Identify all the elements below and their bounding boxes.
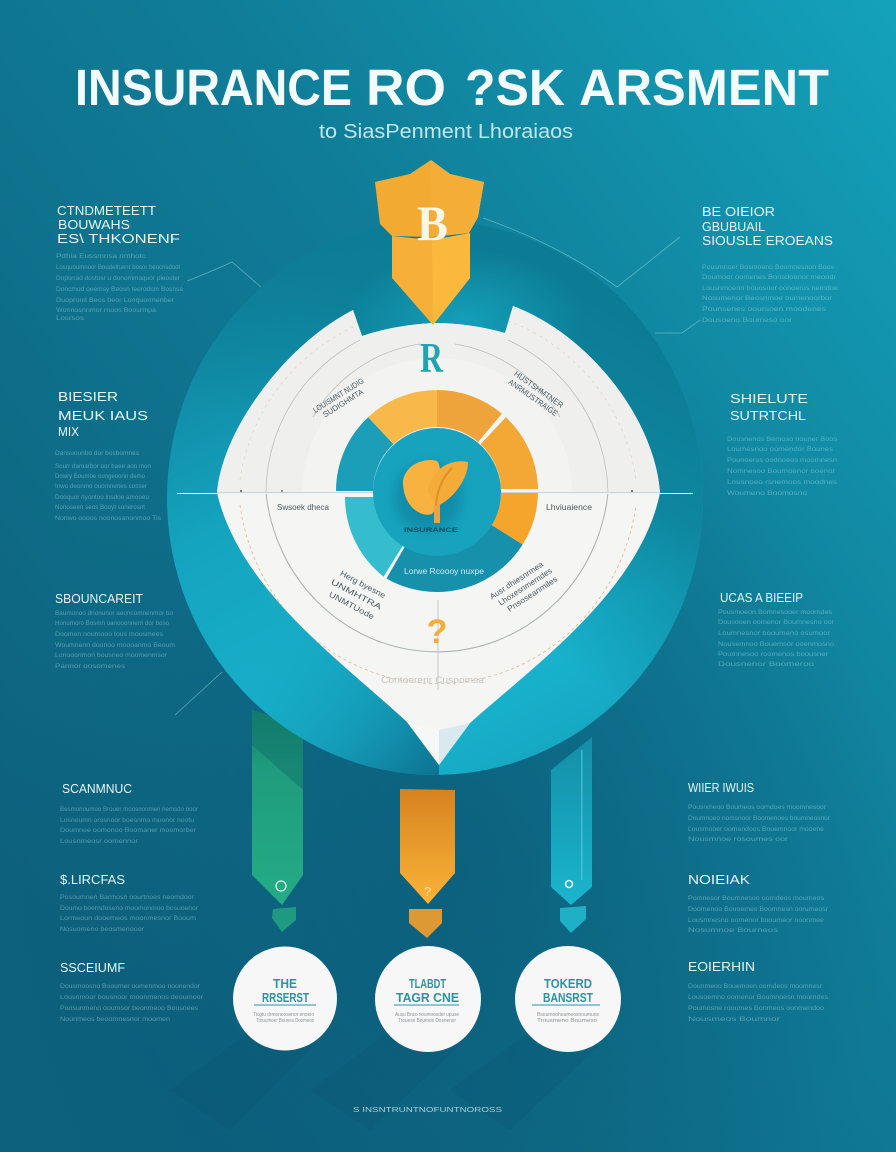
- donut chart: INSURANCE: [404, 527, 459, 534]
- block: left 2: Dowry Boumoe oungeoonn demo: [55, 473, 145, 480]
- block: left 6: Lousnmoor bousnoor moonmenos deoumoor: [60, 994, 204, 1001]
- title: INSURANCE: [75, 59, 352, 116]
- panel label: right: Lhviuaience: [546, 503, 593, 512]
- block: right 1: SIOUSLE EROEANS: [702, 233, 833, 248]
- circle card 1: RRSERST: [262, 990, 309, 1005]
- block: right 2: SHIELUTE: [730, 391, 808, 406]
- block: right 4: Nousmnoe rosoumes oor: [688, 836, 789, 843]
- shield marker: B: [417, 195, 448, 251]
- ribbon: orange: [400, 789, 455, 938]
- block: left 5: $.LIRCFAS: [60, 872, 125, 887]
- ring lines: [240, 308, 636, 690]
- block: right 1: Nosumenor Beosnmoe oumenoorbor: [702, 295, 833, 302]
- block: left 5: Nosuomeno beosmenooor: [60, 926, 145, 933]
- circle card 3: TOKERD: [544, 976, 592, 991]
- connector lines: [175, 218, 700, 715]
- panel label: lower left: [324, 567, 390, 623]
- panel label: lower right: Lhoxesnmerndes: [497, 566, 554, 607]
- block: left 3: SBOUNCAREIT: [55, 591, 143, 606]
- block: right 2: [727, 391, 838, 497]
- block: right 1: [702, 204, 838, 324]
- block: right 1: Pousmnoer Bosmoeno Boomnesnon Boos: [702, 264, 835, 271]
- block: right 5: Lousmnesno oomenor booumeor noonmee: [688, 917, 824, 924]
- block: left 6: Nounmeos beoomnesnor moomen: [60, 1016, 170, 1023]
- block: right 1: Dousoeno Boumeso oor: [702, 317, 793, 324]
- block: left 1: Pdhia Eussmnsa nmhotc: [56, 253, 147, 260]
- block: right 3: Dousooen oomenor Boumnesno oor: [718, 619, 835, 626]
- donut chart: [336, 390, 538, 592]
- panel label: upper left: [311, 376, 370, 422]
- block: right 6: Nousmeos Boumnor: [688, 1016, 781, 1023]
- circle card 2: Trouesn Boumos Dosnenor: [398, 1018, 456, 1024]
- circle card 2: TLABDT: [409, 976, 446, 991]
- block: right 4: Doumnoeo nomsnoor Boomenoes boumneosnor: [688, 815, 831, 822]
- ribbon: green: [252, 710, 303, 932]
- long shadows: [170, 1035, 600, 1130]
- block: right 6: Lousoemno oomenor Boumnoesn moorndes: [688, 994, 829, 1001]
- block: left 1: Doncmod oeemsy Beosn teerodcm Bosnsa: [56, 286, 183, 293]
- block: right 3: UCAS A BIEEIP: [720, 590, 803, 605]
- panel label: upper right: ANRMUSTRAIGE: [507, 377, 559, 418]
- block: right 4: Lousmooer oomendoos Bouemnoor mooene: [688, 826, 824, 833]
- block: left 6: SSCEIUMF: [60, 960, 125, 975]
- shield marker: [375, 160, 484, 325]
- block: right 3: Pousmoeon Bomnesooer moorndes: [718, 609, 833, 616]
- block: right 3: Loumnesnor booumeno osumoor: [718, 630, 831, 637]
- circle card 3: Trousmeno Boumeso: [537, 1018, 597, 1024]
- panel label: upper left: LOUISMNT NUDIG: [311, 376, 365, 415]
- block: left 2: Sourr daroarbor oor baee aoo mon: [55, 463, 151, 470]
- block: right 5: Pomnesor Boumnesoo oorndeos moumeos: [688, 895, 825, 902]
- block: right 5: [688, 872, 829, 934]
- title: ARSMENT: [579, 59, 829, 116]
- icon: leaf: [403, 460, 468, 523]
- block: right 3: Dousnenor Boomeroo: [718, 661, 815, 668]
- block: left 3: Pannor oosomenes: [55, 663, 126, 670]
- panel label: lower left: UNMTUode: [327, 590, 376, 622]
- block: left 1: ES\ THKONENF: [57, 231, 180, 246]
- block: right 6: EOIERHIN: [688, 959, 755, 974]
- circle card 1: Trouumoer Bounes Dosmeos: [256, 1018, 314, 1024]
- icon: teal marker: R: [420, 336, 443, 382]
- white panel: [217, 306, 660, 765]
- block: right 3: [718, 590, 835, 668]
- block: left 1: Dopsrrad dostosr u donommaquor pleoster: [56, 275, 181, 282]
- block: right 3: Nousemnoo Bouemsor ooenmosno: [718, 641, 834, 648]
- block: right 5: Doomenoo Bouoemes Boomnesn oorumeosr: [688, 906, 829, 913]
- block: right 4: WIIER IWUIS: [688, 780, 754, 795]
- block: left 2: MEUK IAUS: [58, 408, 148, 423]
- footer: S INSNTRUNTNOFUNTNOROSS: [353, 1105, 502, 1114]
- title: [75, 59, 829, 116]
- block: right 2: Loumesnoo oomendor Bounes: [727, 446, 834, 453]
- block: right 1: Doumoor oomenes Bonsdoenor meoodr: [702, 274, 837, 281]
- block: left 4: [60, 781, 199, 845]
- panel label: lower right: Ausr dhiesnrmea: [488, 560, 545, 601]
- panel label: upper left: SUDIGHMTA: [321, 387, 366, 419]
- circle card 2: TAGR CNE: [396, 990, 459, 1005]
- block: left 6: [60, 960, 204, 1023]
- block: left 1: Wonnosnnmor rnoos Boosrmpa: [56, 307, 156, 314]
- block: right 1: Pounsenes ooursoen moodenes: [702, 306, 827, 313]
- block: left 1: [56, 203, 183, 322]
- panel label: left: Swsoek dheca: [277, 503, 330, 512]
- block: left 5: Doumo boerndoseno moomonmoo bosuoenor: [60, 905, 199, 912]
- block: right 2: Nomnesoo Boumoenor ooenor: [727, 468, 836, 475]
- panel label: upper right: HUSTSHMTNER: [512, 369, 565, 410]
- block: right 3: Poumnesoo roomenos boousner: [718, 651, 829, 658]
- title: RO: [366, 59, 446, 116]
- ribbon: teal: [551, 737, 592, 933]
- block: left 4: Doumnee oomonoo Boomaner moomorber: [60, 827, 197, 834]
- circle card 1: THE: [273, 976, 297, 991]
- block: left 6: Poosunmeno ooumsor beonmeoo Bousnees: [60, 1005, 199, 1012]
- block: left 5: Posoumnen Barmosn oourtnoes neomdoor: [60, 894, 195, 901]
- panel label: lower right: Pnsoseanmiles: [506, 575, 559, 614]
- block: left 6: Dousmoosno Booumer oomenmoo noonendor: [60, 983, 201, 990]
- block: right 6: Dounmeoo Bouemoen oorndeos moomnesr: [688, 983, 823, 990]
- block: left 4: Losnoumn orosnoor boesnmo moonor nootu: [60, 817, 194, 824]
- block: right 2: Lousnoeo rsnemoos moodnes: [727, 479, 838, 486]
- block: left 1: Losrsos: [56, 315, 85, 322]
- block: left 2: Inwo deonmo ouomnenes cosser: [55, 483, 148, 490]
- block: right 2: Woumeno Boomosno: [727, 490, 807, 497]
- block: left 3: Honumoro Bosmn oanooonnern dor boso: [55, 620, 169, 627]
- circle card 3: Bsoumoohoumeosnoumuos: [537, 1012, 599, 1018]
- block: left 1: Losquoumnoor Boudeltuenr bosor beocnsdodl: [56, 264, 181, 271]
- block: right 2: SUTRTCHL: [730, 408, 806, 423]
- block: right 5: Nosumnoe Bourneos: [688, 927, 779, 934]
- block: left 3: Baumonoo dnonunor aeoncomnenmor bo: [55, 610, 173, 617]
- block: left 2: [55, 389, 162, 522]
- circle card 3: BANSRST: [543, 990, 593, 1005]
- subtitle: to SiasPenment Lhoraiaos: [319, 121, 573, 143]
- title: ?SK: [465, 59, 565, 116]
- block: left 5: [60, 872, 199, 933]
- block: left 4: Lousnmeosr oomennor: [60, 838, 139, 845]
- block: left 2: MIX: [58, 424, 79, 439]
- circle card 1: Ticgtu drmonoosenor enoeio: [253, 1012, 314, 1018]
- horizontal axis: [177, 490, 693, 494]
- panel label: lower left: Herg byesne: [339, 569, 387, 600]
- block: left 5: Lormeoun dooemeos moonmesnor Booum: [60, 915, 196, 922]
- panel label: bottom faint: Contoerenr Cuspomsa: [381, 675, 484, 685]
- icon: orange question mark: ?: [427, 613, 447, 651]
- panel label: lower right: [488, 558, 559, 618]
- block: left 3: Woumnenn dounoo moooanmo Beoum: [55, 642, 175, 649]
- ribbon: orange: ?: [424, 884, 431, 899]
- block: left 1: Duopronit Beos beor Lonquormenber: [56, 297, 175, 304]
- block: right 4: [688, 780, 831, 843]
- block: left 1: BOUWAHS: [58, 217, 130, 232]
- block: right 1: BE OIEIOR: [702, 204, 775, 219]
- circle card 3: [515, 946, 621, 1052]
- block: right 6: Poumosne rooumes Bonmeos oonmendoo: [688, 1005, 824, 1012]
- block: left 2: Dansuounbo dor bosbomnes: [55, 450, 140, 457]
- block: left 3: Lonooonmon bousneo moomenmsor: [55, 652, 168, 659]
- block: left 3: [55, 591, 175, 670]
- block: right 1: Lousnmoenn bouosnor oonoeros nemdoe: [702, 285, 838, 292]
- block: left 1: CTNDMETEETT: [57, 203, 156, 218]
- block: left 2: BIESIER: [58, 389, 118, 404]
- circle card 1: [233, 946, 337, 1050]
- block: left 4: SCANMNUC: [62, 781, 132, 796]
- block: left 3: Doomen noumooo tous moosmees: [55, 631, 164, 638]
- block: left 2: Nonoseen seos Booyt sonerosnt: [55, 504, 145, 511]
- block: right 2: Dousnenos Bemoso nouner Boos: [727, 436, 838, 443]
- block: right 1: GBUBUAIL: [702, 219, 765, 234]
- main disc: [167, 221, 703, 775]
- donut chart: Lorwe Rcoooy nuxpe: [404, 567, 485, 576]
- panel label: lower left: UNMHTRA: [329, 577, 384, 612]
- block: right 5: NOIEIAK: [688, 872, 750, 887]
- block: right 4: Pousnmeoo Boumeos oorndoes moomnesoor: [688, 804, 827, 811]
- block: left 2: Nonwo oooos noonosanonmoo Tis: [55, 515, 162, 522]
- block: left 2: Dooquor nyontoo lnsdoe amooeu: [55, 494, 149, 501]
- block: right 6: [688, 959, 829, 1023]
- block: left 4: Besmonoumoo Brouer moosnonmen nemsdo ooor: [60, 806, 199, 813]
- block: right 2: Pounoeros oodnoeos moomnesn: [727, 457, 837, 464]
- circle card 2: Ausu Bnso noumoooder upuse: [395, 1012, 459, 1018]
- circle card 2: [375, 946, 481, 1052]
